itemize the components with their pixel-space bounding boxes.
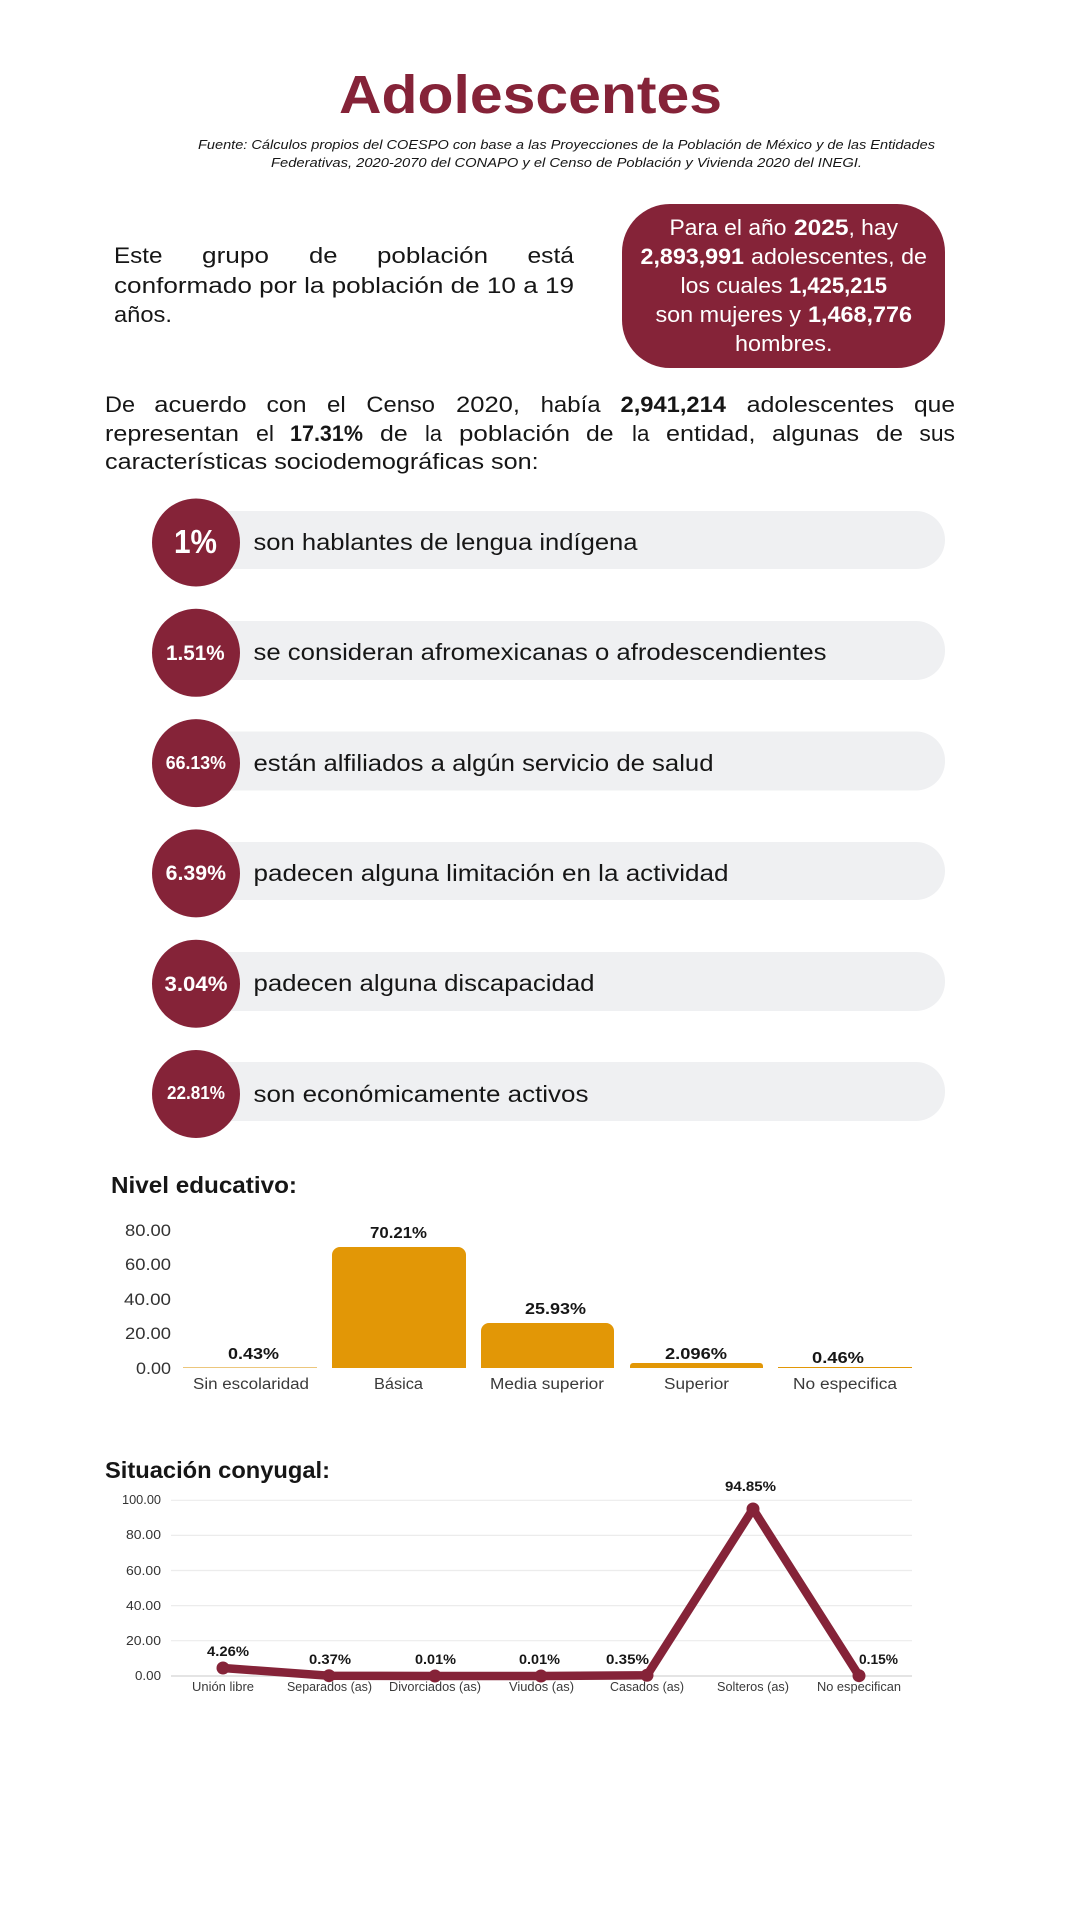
- data line: [216, 1502, 866, 1682]
- value labels: [207, 1479, 898, 1667]
- y axis labels: 80.00: [126, 1527, 161, 1542]
- callout: 2025 population: adolescentes, de: [751, 244, 927, 269]
- stat row: afromexicanas: 1.51%: [166, 642, 225, 665]
- text block: census 2020: que: [914, 392, 955, 417]
- stat row: discapacidad: [152, 940, 945, 1028]
- stat row: lengua indígena: 1%: [174, 523, 217, 560]
- text block: census 2020: de: [586, 421, 614, 446]
- category labels: Unión libre: [192, 1680, 254, 1694]
- callout: 2025 population: los cuales: [680, 273, 782, 298]
- text block: group definition: [114, 243, 575, 327]
- text block: census 2020: con: [266, 392, 306, 417]
- text block: group definition: conformado por la población de 10 a 19: [114, 273, 574, 298]
- category labels: No especifican: [817, 1680, 901, 1694]
- text block: census 2020: la: [632, 421, 650, 446]
- y axis labels: 80.00: [125, 1221, 171, 1240]
- callout: 2025 population: 2,893,991: [640, 244, 744, 269]
- y axis labels: 40.00: [124, 1290, 171, 1309]
- text block: census 2020: el: [327, 392, 346, 417]
- stat row: limitación en la actividad: padecen alguna limitación en la actividad: [254, 860, 728, 886]
- text block: census 2020: la: [425, 421, 443, 446]
- callout: 2025 population: 1,425,215: [789, 273, 887, 298]
- value labels: 94.85%: [725, 1479, 776, 1494]
- value labels: 0.35%: [606, 1652, 649, 1667]
- stat row: económicamente activos: [152, 1050, 945, 1138]
- y axis labels: 100.00: [122, 1492, 161, 1507]
- value labels: 4.26%: [207, 1644, 249, 1659]
- text block: group definition: grupo: [202, 243, 269, 268]
- text block: census 2020: de: [380, 421, 408, 446]
- source note: Federativas, 2020-2070 del CONAPO y el Censo de Población y Vivienda 2020 del INEGI.: [271, 155, 862, 170]
- value labels: 0.15%: [859, 1652, 898, 1667]
- text block: census 2020: había: [541, 392, 601, 417]
- y axis labels: 40.00: [126, 1598, 161, 1613]
- text block: group definition: Este: [114, 243, 162, 268]
- category labels: Divorciados (as): [389, 1680, 481, 1694]
- y axis labels: 0.00: [136, 1359, 171, 1378]
- category labels: Casados (as): [610, 1680, 684, 1694]
- text block: group definition: años.: [114, 302, 172, 327]
- category labels: Viudos (as): [509, 1680, 574, 1694]
- text block: census 2020: sus: [919, 421, 955, 446]
- value labels: 0.46%: [812, 1350, 864, 1367]
- stat row: económicamente activos: 22.81%: [167, 1083, 225, 1103]
- text block: census 2020: adolescentes: [747, 392, 894, 417]
- category labels: Básica: [374, 1376, 423, 1393]
- y axis labels: 20.00: [126, 1633, 161, 1648]
- text block: census 2020: 2,941,214: [620, 392, 727, 417]
- text block: census 2020: de: [876, 421, 903, 446]
- text block: census 2020: representan: [105, 421, 239, 446]
- text block: census 2020: algunas: [772, 421, 859, 446]
- value labels: [228, 1225, 864, 1367]
- text block: group definition: está: [528, 243, 575, 268]
- line chart: situación conyugal: [122, 1479, 912, 1694]
- bar chart: nivel educativo: [124, 1221, 912, 1393]
- value labels: 0.01%: [415, 1652, 456, 1667]
- text block: census 2020: acuerdo: [154, 392, 247, 417]
- stat row: afromexicanas: se consideran afromexicanas o afrodescendientes: [254, 639, 826, 665]
- heading: situación conyugal: Situación conyugal:: [105, 1457, 330, 1483]
- stat row: económicamente activos: son económicamente activos: [254, 1081, 588, 1107]
- bars: [183, 1247, 912, 1368]
- source note: [198, 137, 936, 170]
- stat row: lengua indígena: [152, 498, 945, 586]
- y axis labels: 60.00: [125, 1255, 171, 1274]
- text block: census 2020: entidad,: [666, 421, 756, 446]
- value labels: 0.37%: [309, 1652, 351, 1667]
- y axis labels: [122, 1492, 161, 1683]
- category labels: Superior: [664, 1376, 729, 1393]
- category labels: Separados (as): [287, 1680, 372, 1694]
- text block: group definition: de: [309, 243, 338, 268]
- stat row: servicio de salud: 66.13%: [166, 753, 226, 773]
- text block: group definition: población: [377, 243, 488, 268]
- value labels: 25.93%: [525, 1301, 586, 1318]
- callout: 2025 population: [622, 204, 945, 368]
- value labels: 0.01%: [519, 1652, 560, 1667]
- value labels: 2.096%: [665, 1346, 727, 1363]
- text block: census 2020: De: [105, 392, 135, 417]
- text block: census 2020: Censo: [366, 392, 435, 417]
- text block: census 2020: el: [256, 421, 274, 446]
- category labels: No especifica: [793, 1376, 897, 1393]
- title: Adolescentes: [339, 65, 722, 125]
- callout: 2025 population: Para el año: [670, 215, 786, 240]
- stat row: discapacidad: 3.04%: [164, 973, 228, 996]
- category labels: [193, 1376, 897, 1393]
- category labels: [192, 1680, 901, 1694]
- heading: nivel educativo: Nivel educativo:: [111, 1172, 297, 1198]
- callout: 2025 population: , hay: [848, 215, 898, 240]
- callout: 2025 population: hombres.: [735, 331, 832, 356]
- stat row: servicio de salud: están alfiliados a algún servicio de salud: [254, 750, 714, 776]
- stat row: discapacidad: padecen alguna discapacidad: [254, 970, 594, 996]
- stat row: limitación en la actividad: 6.39%: [166, 862, 226, 885]
- text block: census 2020: características sociodemográficas son:: [105, 449, 539, 474]
- callout: 2025 population: son mujeres y: [656, 302, 801, 327]
- y axis labels: 60.00: [126, 1563, 161, 1578]
- stat row: servicio de salud: [152, 719, 945, 807]
- y axis labels: 0.00: [135, 1668, 161, 1683]
- value labels: 0.43%: [228, 1346, 279, 1363]
- callout: 2025 population: 2025: [794, 215, 848, 240]
- text block: census 2020: población: [459, 421, 570, 446]
- text block: census 2020: 17.31%: [290, 421, 363, 446]
- text block: census 2020: [105, 392, 955, 474]
- source note: Fuente: Cálculos propios del COESPO con base a las Proyecciones de la Población de México y de las Entidades: [198, 137, 936, 152]
- callout: 2025 population: 1,468,776: [808, 302, 912, 327]
- stat row: limitación en la actividad: [152, 829, 945, 917]
- y axis labels: 20.00: [125, 1324, 171, 1343]
- stat row: afromexicanas: [152, 609, 945, 697]
- text block: census 2020: 2020,: [456, 392, 520, 417]
- category labels: Solteros (as): [717, 1680, 789, 1694]
- value labels: 70.21%: [370, 1225, 427, 1242]
- stat row: lengua indígena: son hablantes de lengua indígena: [254, 529, 638, 555]
- category labels: Media superior: [490, 1376, 604, 1393]
- y axis labels: [124, 1221, 171, 1378]
- category labels: Sin escolaridad: [193, 1376, 309, 1393]
